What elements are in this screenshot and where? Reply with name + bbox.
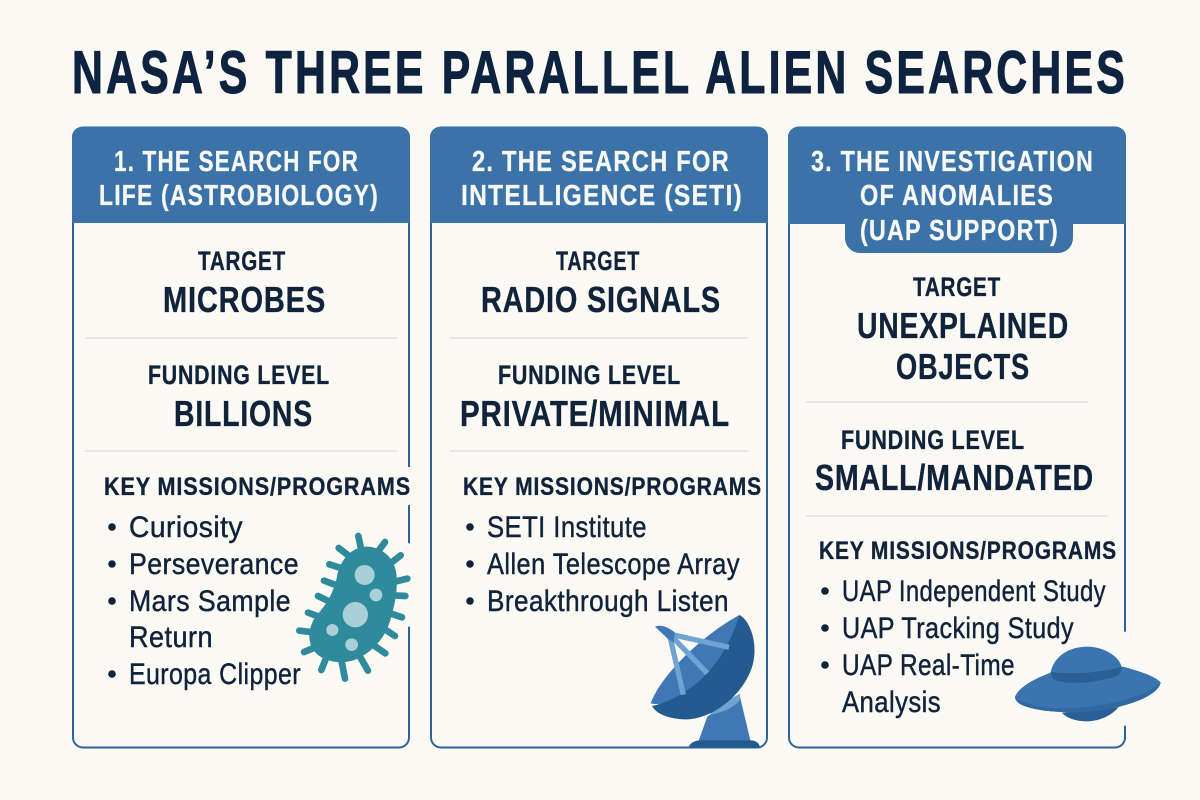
panel header: investigation of anomalies: (UAP SUPPORT) xyxy=(860,215,1059,247)
panel: search for intelligence xyxy=(430,127,768,748)
panel header: search for intelligence: 2. THE SEARCH FOR xyxy=(472,146,730,178)
mission list: Breakthrough Listen xyxy=(487,585,729,618)
target value: UNEXPLAINED xyxy=(857,305,1069,346)
panel header: investigation of anomalies xyxy=(788,127,1126,253)
icon: microbe xyxy=(299,536,415,679)
target value: MICROBES xyxy=(163,279,326,320)
mission list: Mars Sample xyxy=(129,585,291,618)
mission list: Analysis xyxy=(842,686,941,719)
panel header: search for life xyxy=(72,127,410,223)
mission list: UAP Independent Study xyxy=(842,575,1106,608)
mission list: Curiosity xyxy=(129,511,243,544)
icon: flying saucer xyxy=(1015,632,1161,726)
target label: TARGET xyxy=(556,246,640,276)
panel header: search for intelligence: INTELLIGENCE (SETI) xyxy=(461,180,743,212)
panel header: search for life: 1. THE SEARCH FOR xyxy=(114,146,359,178)
funding value: PRIVATE/MINIMAL xyxy=(460,393,730,434)
funding label: FUNDING LEVEL xyxy=(498,360,681,390)
target label: TARGET xyxy=(198,246,286,276)
mission list xyxy=(466,511,740,618)
icon: radio dish xyxy=(651,615,760,747)
mission list: Europa Clipper xyxy=(129,658,301,691)
mission list: Return xyxy=(129,621,213,654)
mission list: UAP Tracking Study xyxy=(842,612,1074,645)
target value xyxy=(857,305,1069,387)
target label: TARGET xyxy=(913,272,1001,302)
funding value: BILLIONS xyxy=(174,393,313,434)
mission list xyxy=(108,511,301,691)
mission list: Allen Telescope Array xyxy=(487,548,740,581)
mission list: Perseverance xyxy=(129,548,299,581)
funding label: FUNDING LEVEL xyxy=(148,360,330,390)
panel header: search for life: LIFE (ASTROBIOLOGY) xyxy=(99,180,379,212)
key missions label: KEY MISSIONS/PROGRAMS xyxy=(463,473,762,501)
panel: search for life xyxy=(72,127,420,748)
funding value: SMALL/MANDATED xyxy=(815,457,1094,498)
panel header: investigation of anomalies: OF ANOMALIES xyxy=(860,180,1054,212)
funding label: FUNDING LEVEL xyxy=(841,425,1025,455)
panel header: investigation of anomalies: 3. THE INVESTIGATION xyxy=(811,146,1094,178)
target value: OBJECTS xyxy=(896,346,1030,387)
mission list xyxy=(821,575,1106,719)
key missions label: KEY MISSIONS/PROGRAMS xyxy=(104,473,411,501)
key missions label: KEY MISSIONS/PROGRAMS xyxy=(819,537,1117,565)
panel header: search for intelligence xyxy=(430,127,768,223)
mission list: UAP Real-Time xyxy=(842,649,1015,682)
target value: RADIO SIGNALS xyxy=(481,279,721,320)
mission list: SETI Institute xyxy=(487,511,647,544)
panel: investigation of anomalies xyxy=(788,127,1161,748)
border gap behind heading xyxy=(400,467,420,505)
